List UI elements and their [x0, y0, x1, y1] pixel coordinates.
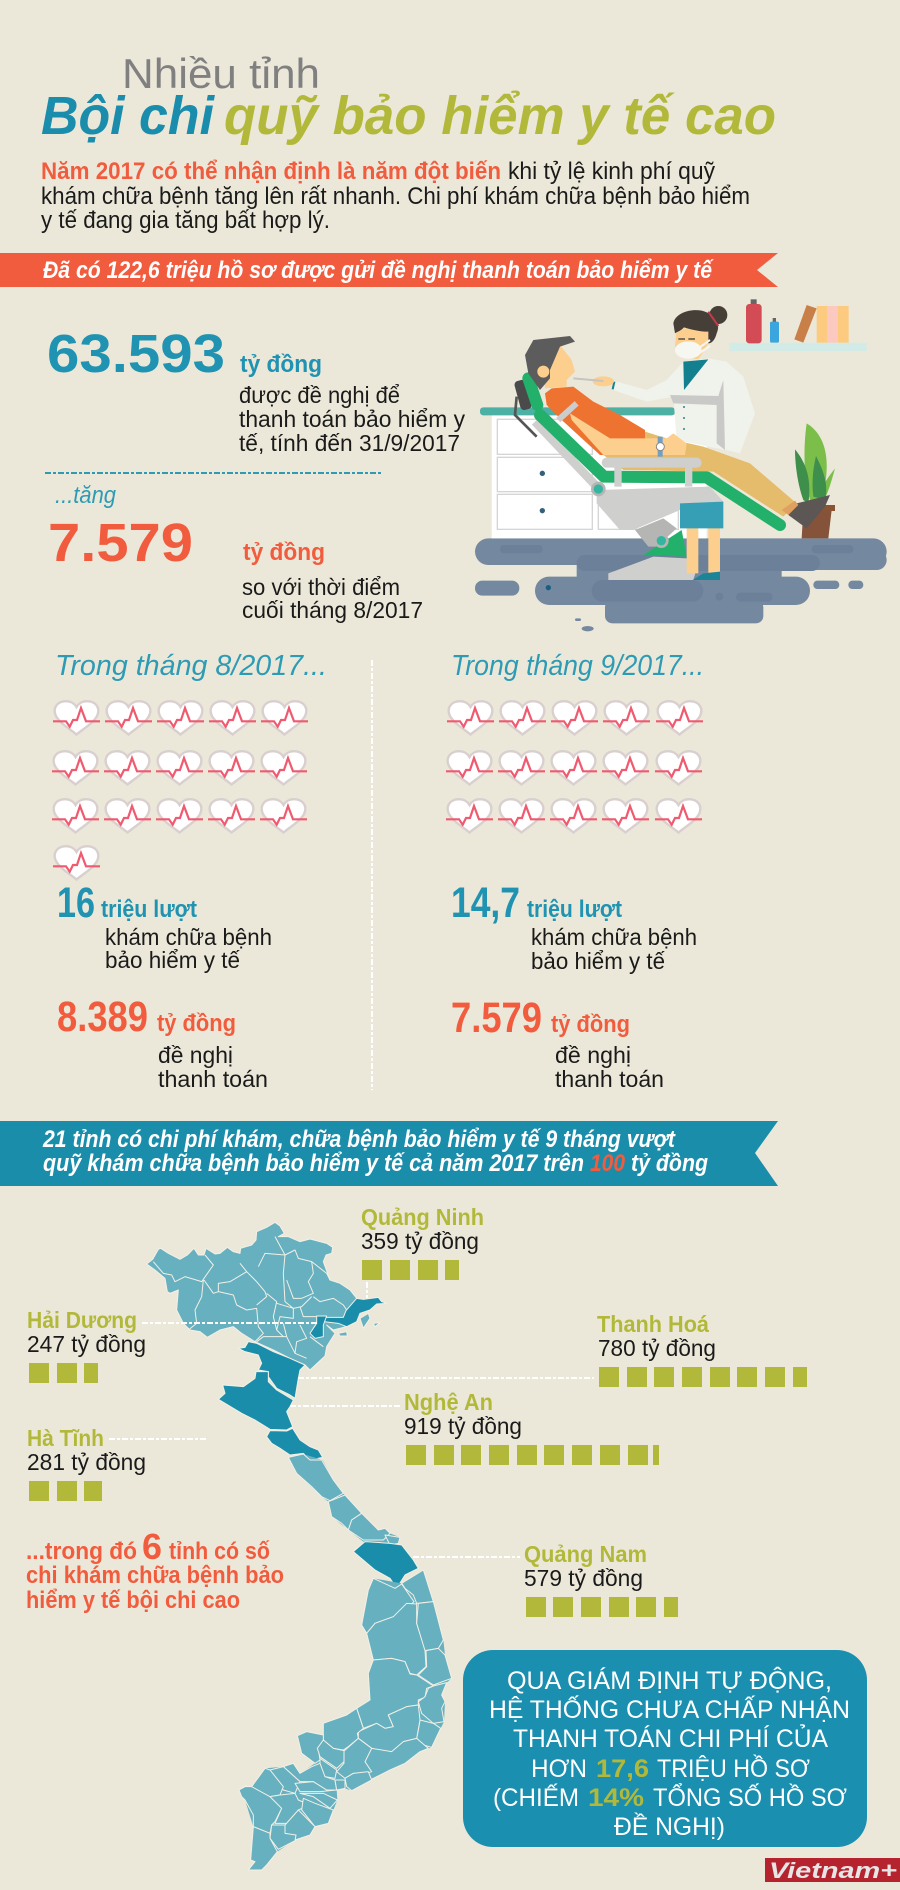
- label: Thanh Hoá 780 tỷ đồng: Thanh Hoá: [597, 1311, 709, 1337]
- stat: 7.579 tỷ đồng: đề nghị: [555, 1042, 631, 1068]
- stat: 14,7 triệu lượt: triệu lượt: [527, 896, 622, 923]
- stat: 7.579 tỷ đồng: thanh toán: [555, 1066, 664, 1092]
- map: southern provinces: [239, 1570, 452, 1870]
- stat: 16 triệu lượt: 16: [57, 879, 95, 927]
- callout box: automatic review: (CHIẾM: [493, 1783, 579, 1812]
- stat: 63.593 tỷ đồng: [47, 324, 465, 456]
- stat: 14,7 triệu lượt: bảo hiểm y tế: [531, 948, 665, 974]
- intro text: khi tỷ lệ kinh phí quỹ: [508, 158, 715, 185]
- map of Vietnam: [147, 1222, 452, 1870]
- logo: Vietnam+: Vietnam+: [769, 1858, 897, 1883]
- stat: tăng 7.579 tỷ đồng: tỷ đồng: [243, 539, 325, 566]
- callout: 6 provinces overspent: [26, 1526, 284, 1614]
- callout box: automatic review: ĐỀ NGHỊ): [614, 1812, 725, 1841]
- stat: 8.389 tỷ đồng: thanh toán: [158, 1066, 268, 1092]
- chair seat: [540, 415, 780, 548]
- stat: 16 triệu lượt: khám chữa bệnh: [105, 924, 272, 950]
- stat: 63.593 tỷ đồng: tế, tính đến 31/9/2017: [239, 430, 460, 456]
- stat: 16 triệu lượt: triệu lượt: [101, 896, 197, 923]
- stat: 8.389 tỷ đồng: đề nghị: [158, 1042, 233, 1068]
- title line: Nhiều tỉnh: Nhiều tỉnh: [122, 50, 320, 97]
- label: Quảng Ninh 359 tỷ đồng: 359 tỷ đồng: [361, 1228, 479, 1254]
- stat: 14,7 triệu lượt: [451, 879, 697, 974]
- cabinet: [480, 407, 707, 538]
- callout box: automatic review: HỆ THỐNG CHƯA CHẤP NHẬN: [489, 1694, 850, 1724]
- callout: 6 provinces overspent: hiểm y tế bội chi cao: [26, 1587, 240, 1614]
- intro text: y tế đang gia tăng bất hợp lý.: [41, 207, 330, 234]
- label: Hải Dương 247 tỷ đồng: Hải Dương: [27, 1307, 137, 1333]
- banner: 21 tỉnh: 21 tỉnh có chi phí khám, chữa bệnh bảo hiểm y tế 9 tháng vượt: [42, 1126, 676, 1153]
- banner: 21 tỉnh: 100: [590, 1150, 626, 1177]
- stat: 7.579 tỷ đồng: [451, 994, 664, 1092]
- dentist legs and skirt: [680, 502, 723, 580]
- stat: 63.593 tỷ đồng: 63.593: [47, 324, 225, 384]
- title: [41, 50, 776, 146]
- label: Nghệ An 919 tỷ đồng: 919 tỷ đồng: [404, 1413, 522, 1439]
- stat: tăng 7.579 tỷ đồng: 7.579: [48, 513, 193, 573]
- stat: tăng 7.579 tỷ đồng: ...tăng: [55, 482, 117, 509]
- stat: 8.389 tỷ đồng: [57, 993, 268, 1092]
- dentist head: [673, 306, 727, 359]
- callout box: automatic review: QUA GIÁM ĐỊNH TỰ ĐỘNG,: [507, 1666, 832, 1695]
- stat: tăng 7.579 tỷ đồng: [48, 482, 423, 623]
- stat: 8.389 tỷ đồng: tỷ đồng: [157, 1010, 236, 1037]
- stat: 14,7 triệu lượt: 14,7: [451, 879, 520, 927]
- label: Thanh Hoá 780 tỷ đồng: [597, 1311, 807, 1387]
- stat: 16 triệu lượt: [57, 879, 272, 973]
- callout box: automatic review: [463, 1650, 867, 1847]
- label: Hà Tĩnh 281 tỷ đồng: 281 tỷ đồng: [27, 1449, 146, 1475]
- stat: tăng 7.579 tỷ đồng: cuối tháng 8/2017: [242, 597, 423, 623]
- dental chair: [514, 378, 723, 580]
- stat: 8.389 tỷ đồng: 8.389: [57, 993, 148, 1041]
- stat: 14,7 triệu lượt: khám chữa bệnh: [531, 924, 697, 950]
- label: Hà Tĩnh 281 tỷ đồng: Hà Tĩnh: [27, 1425, 104, 1451]
- banner: 21 tỉnh: quỹ khám chữa bệnh bảo hiểm y tế cả năm 2017 trên: [43, 1150, 584, 1177]
- floor: [475, 538, 887, 631]
- dentist body: [573, 358, 755, 453]
- label: Nghệ An 919 tỷ đồng: [404, 1389, 659, 1465]
- label: Thanh Hoá 780 tỷ đồng: 780 tỷ đồng: [598, 1335, 716, 1361]
- panel: September 2017: [446, 650, 704, 1092]
- label: Quảng Nam 579 tỷ đồng: Quảng Nam: [524, 1541, 647, 1567]
- banner: 122,6 triệu hồ sơ: Đã có 122,6 triệu hồ sơ được gửi đề nghị thanh toán bảo hiểm y tế: [43, 257, 714, 284]
- callout: 6 provinces overspent: ...trong đó: [26, 1538, 137, 1565]
- callout: 6 provinces overspent: tỉnh có số: [169, 1538, 270, 1565]
- callout: 6 provinces overspent: chi khám chữa bệnh bảo: [26, 1562, 284, 1589]
- stat: 7.579 tỷ đồng: tỷ đồng: [551, 1011, 630, 1038]
- label: Hải Dương 247 tỷ đồng: [27, 1307, 146, 1383]
- potted plant: [795, 423, 835, 538]
- map: northern provinces: [147, 1222, 418, 1588]
- title: Bội chi: Bội chi: [41, 86, 215, 146]
- intro text: Năm 2017 có thể nhận định là năm đột biến: [41, 158, 501, 185]
- label: Hà Tĩnh 281 tỷ đồng: [27, 1425, 146, 1501]
- label: Quảng Ninh 359 tỷ đồng: [361, 1204, 484, 1280]
- heading: Trong tháng 9/2017...: [451, 650, 704, 682]
- callout box: automatic review: 17,6: [596, 1755, 649, 1783]
- label: Quảng Nam 579 tỷ đồng: 579 tỷ đồng: [524, 1565, 643, 1591]
- title: quỹ bảo hiểm y tế cao: quỹ bảo hiểm y tế cao: [224, 86, 776, 146]
- callout box: automatic review: TỔNG SỐ HỒ SƠ: [653, 1782, 847, 1812]
- callout box: automatic review: 14%: [588, 1784, 644, 1812]
- label: Nghệ An 919 tỷ đồng: Nghệ An: [404, 1389, 493, 1415]
- stat: tăng 7.579 tỷ đồng: so với thời điểm: [242, 574, 400, 600]
- hearts: 16 million visits: [52, 701, 308, 880]
- map: central coast provinces: [288, 1454, 400, 1545]
- intro text: khám chữa bệnh tăng lên rất nhanh. Chi phí khám chữa bệnh bảo hiểm: [41, 183, 750, 210]
- patient: [525, 336, 830, 528]
- shelf with bottles and books: [729, 299, 867, 351]
- callout box: automatic review: HƠN: [531, 1755, 587, 1783]
- stat: 16 triệu lượt: bảo hiểm y tế: [105, 947, 240, 973]
- banner: 21 tỉnh: tỷ đồng: [631, 1150, 708, 1177]
- heading: Trong tháng 8/2017...: [55, 650, 327, 682]
- stat: 7.579 tỷ đồng: 7.579: [451, 994, 542, 1042]
- callout box: automatic review: THANH TOÁN CHI PHÍ CỦA: [513, 1723, 828, 1753]
- callout: 6 provinces overspent: 6: [142, 1526, 162, 1567]
- banner: 21 tỉnh: [0, 1121, 778, 1186]
- stat: 63.593 tỷ đồng: tỷ đồng: [240, 351, 322, 378]
- map: Quảng Nam: [353, 1542, 418, 1588]
- illustration: dentist and patient: [475, 299, 887, 631]
- label: Quảng Ninh 359 tỷ đồng: Quảng Ninh: [361, 1204, 484, 1230]
- stat: 63.593 tỷ đồng: thanh toán bảo hiểm y: [239, 406, 465, 432]
- callout box: automatic review: TRIỆU HỒ SƠ: [657, 1753, 810, 1783]
- label: Quảng Nam 579 tỷ đồng: [524, 1541, 678, 1617]
- stat: 63.593 tỷ đồng: được đề nghị để: [239, 382, 400, 408]
- hearts: 14.7 million visits: [446, 701, 703, 832]
- map: high-spending northern provinces: [218, 1297, 387, 1460]
- label: Hải Dương 247 tỷ đồng: 247 tỷ đồng: [27, 1331, 146, 1357]
- intro text: [41, 158, 750, 234]
- panel: August 2017: [52, 650, 327, 1092]
